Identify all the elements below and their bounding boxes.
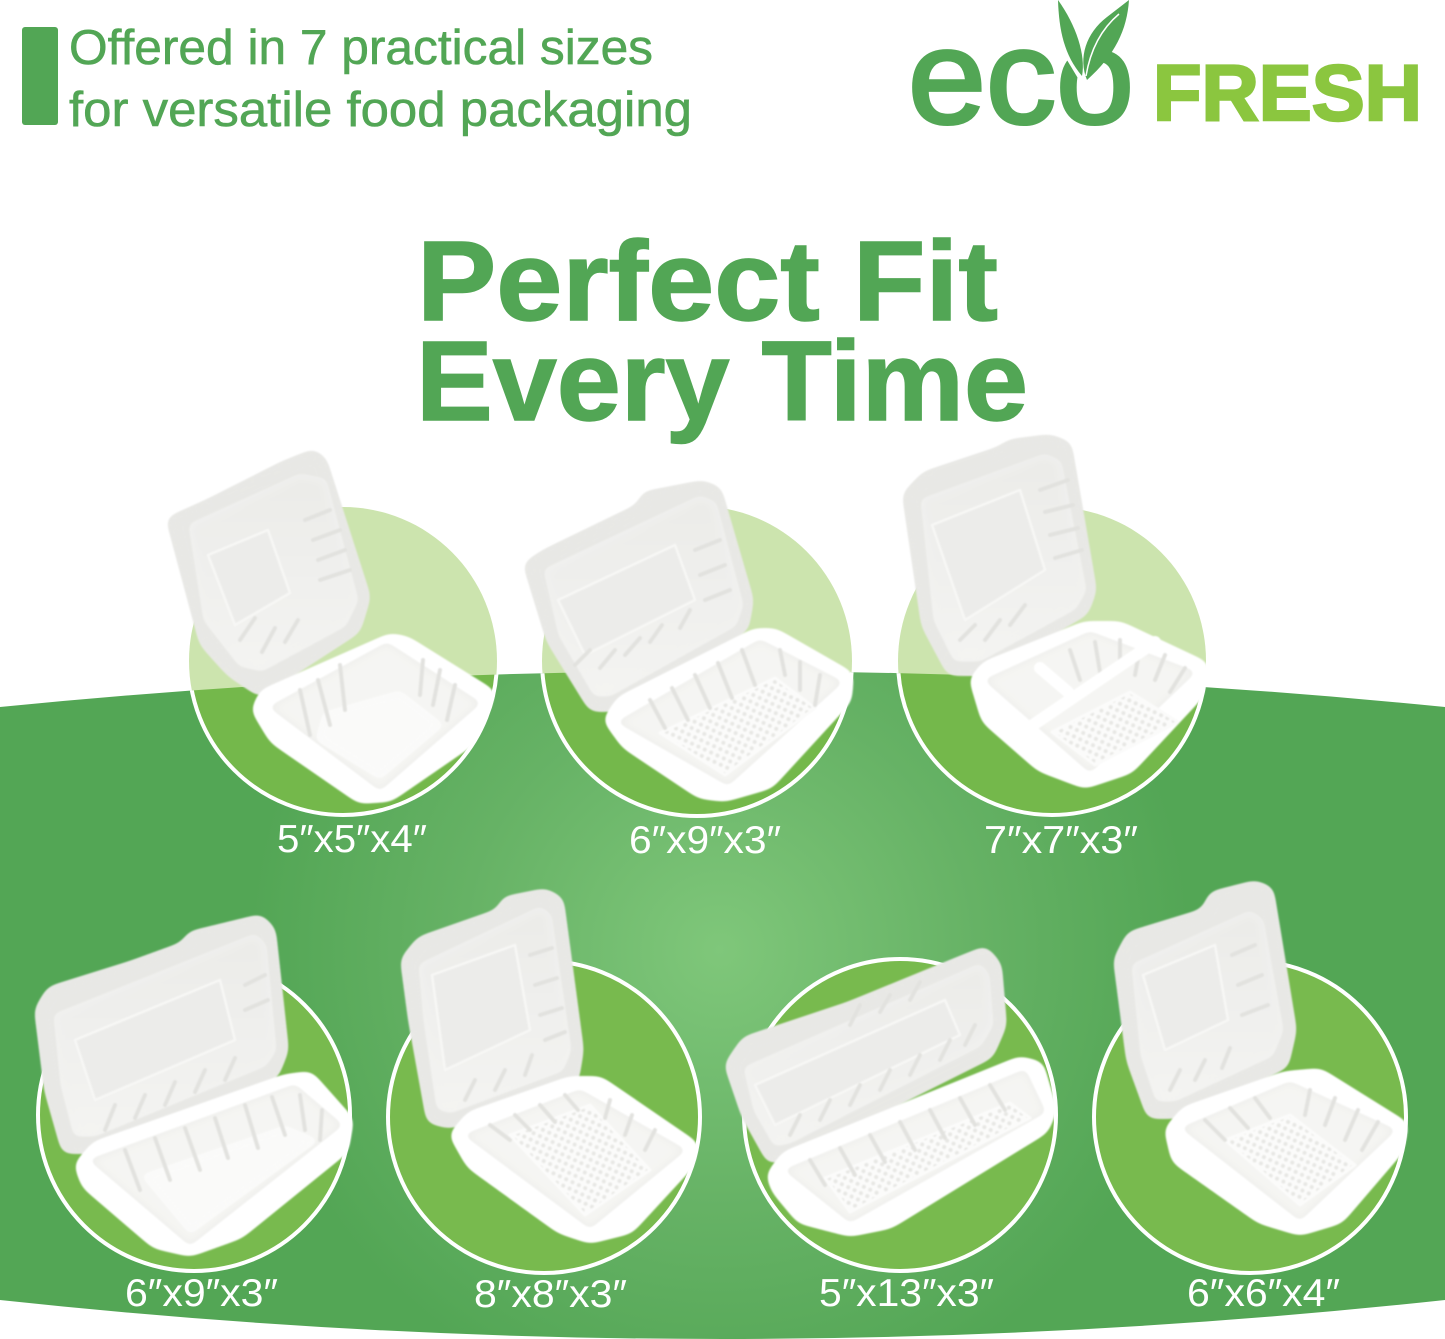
label: 5x13x3: 5″x13″x3″ — [819, 1272, 994, 1315]
icon: left leaf — [1058, 0, 1083, 76]
title: Perfect Fit — [417, 218, 998, 344]
title: Every Time — [416, 318, 1028, 444]
container: 8x8x3 — [404, 892, 695, 1240]
container: 6x6x4 — [1117, 884, 1405, 1232]
icon: right leaf — [1083, 0, 1129, 80]
circle: 8x8x3 — [388, 961, 700, 1273]
label: 7x7x3: 7″x7″x3″ — [984, 819, 1138, 862]
circle: 6x6x4 — [1094, 961, 1406, 1273]
label: 6x9x3 bottom: 6″x9″x3″ — [125, 1272, 278, 1315]
circle: 6x9x3 bottom — [38, 959, 350, 1271]
label: 5x5x4: 5″x5″x4″ — [277, 818, 427, 861]
logo: ecoFRESH — [908, 0, 1422, 152]
logo: ecoFRESH: FRESH — [1153, 48, 1422, 137]
container: 5x5x4 — [170, 453, 492, 800]
circle: 5x13x3 — [744, 959, 1056, 1271]
title — [416, 218, 1028, 444]
label: 8x8x3: 8″x8″x3″ — [474, 1273, 627, 1316]
container: 5x13x3 — [728, 950, 1053, 1233]
accent bar — [22, 27, 58, 125]
tagline — [69, 21, 692, 137]
circle: 7x7x3 — [898, 507, 1206, 815]
circle: 6x9x3 top — [542, 506, 852, 816]
container: 7x7x3 — [906, 438, 1205, 785]
tagline: for versatile food packaging — [69, 83, 692, 137]
label: 6x9x3 top: 6″x9″x3″ — [629, 819, 781, 862]
green background band — [0, 671, 1445, 1339]
container: 6x9x3 bottom — [38, 918, 350, 1253]
container: 6x9x3 top — [527, 484, 850, 798]
logo: ecoFRESH: eco — [908, 3, 1134, 152]
label: 6x6x4: 6″x6″x4″ — [1187, 1272, 1340, 1315]
circle: 5x5x4 — [189, 507, 497, 815]
tagline: Offered in 7 practical sizes — [69, 21, 653, 75]
